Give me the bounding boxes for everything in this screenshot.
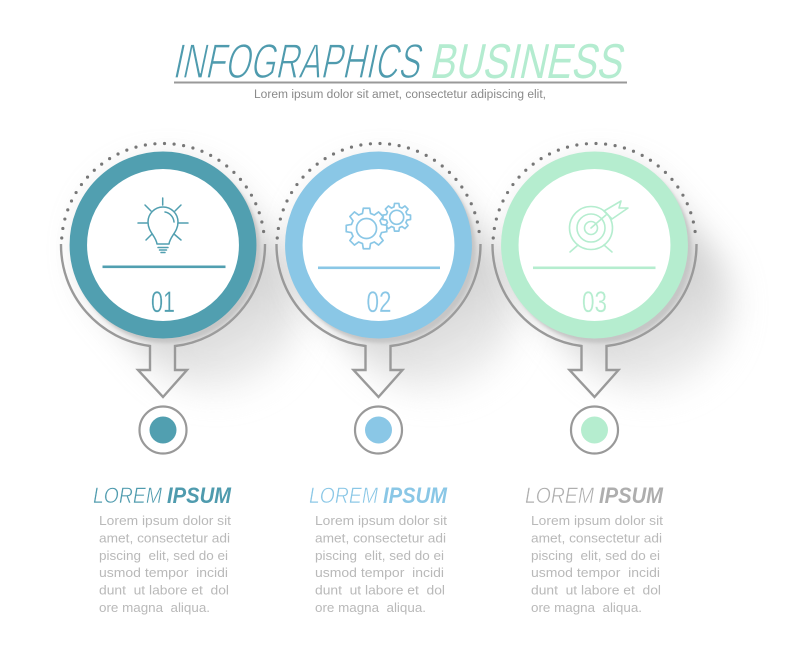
body copy: usmod tempor incidi: [99, 565, 228, 580]
dotted arc: [277, 143, 480, 238]
body copy: dunt ut labore et dol: [99, 583, 229, 598]
body copy: ore magna aliqua.: [531, 600, 642, 615]
heading: IPSUM: [383, 483, 448, 508]
body copy: ore magna aliqua.: [315, 600, 426, 615]
arc and arrow outline: [276, 244, 481, 397]
target marker: [571, 406, 618, 454]
body copy: usmod tempor incidi: [315, 565, 444, 580]
body copy: piscing elit, sed do ei: [315, 548, 444, 563]
number 01: 01: [151, 286, 175, 319]
target marker: [355, 406, 402, 454]
heading: IPSUM: [599, 483, 664, 508]
number 03: 03: [582, 286, 607, 319]
body copy: amet, consectetur adi: [99, 530, 230, 545]
body copy: Lorem ipsum dolor sit: [99, 513, 231, 528]
number 02: 02: [366, 286, 392, 319]
ring drop shadow: [74, 157, 260, 343]
icon: target with arrow: [570, 201, 628, 252]
icon: gears: [346, 203, 411, 249]
body copy: [99, 513, 231, 615]
text block: column 1: [93, 483, 232, 615]
ring: [294, 160, 463, 330]
body copy: amet, consectetur adi: [315, 530, 446, 545]
body copy: [531, 513, 663, 615]
heading: LOREM: [93, 483, 163, 508]
body copy: dunt ut labore et dol: [315, 583, 445, 598]
text block: column 3: [525, 483, 664, 615]
body copy: piscing elit, sed do ei: [99, 548, 228, 563]
body copy: dunt ut labore et dol: [531, 583, 661, 598]
ring: [78, 160, 248, 330]
icon: light bulb: [138, 198, 188, 252]
ring drop shadow: [506, 157, 692, 343]
subtitle: Lorem ipsum dolor sit amet, consectetur adipiscing elit,: [254, 89, 546, 101]
divider: [102, 266, 226, 268]
body copy: amet, consectetur adi: [531, 530, 662, 545]
panel: step 02: [276, 143, 481, 454]
body copy: [315, 513, 447, 615]
ring: [510, 160, 679, 330]
body copy: Lorem ipsum dolor sit: [531, 513, 663, 528]
arc and arrow outline: [492, 244, 697, 397]
title word: infographics: INFOGRAPHICS: [170, 33, 428, 89]
divider: [318, 266, 440, 269]
long shadow: [600, 250, 648, 306]
long shadow: [384, 250, 432, 306]
title word: business: BUSINESS: [427, 33, 630, 89]
body copy: Lorem ipsum dolor sit: [315, 513, 447, 528]
dotted arc: [62, 143, 264, 238]
panel: step 03: [492, 143, 697, 453]
text block: column 2: [309, 483, 448, 615]
title underline: [174, 82, 627, 84]
target marker: [140, 406, 186, 454]
panel: step 01: [61, 143, 265, 454]
arc and arrow outline: [61, 244, 265, 397]
body copy: piscing elit, sed do ei: [531, 548, 660, 563]
heading: LOREM: [525, 483, 595, 508]
body copy: ore magna aliqua.: [99, 600, 210, 615]
long shadow: [168, 250, 216, 306]
ring drop shadow: [290, 157, 476, 343]
title: [170, 33, 630, 89]
dotted arc: [493, 143, 696, 238]
divider: [533, 266, 656, 269]
heading: LOREM: [309, 483, 379, 508]
heading: IPSUM: [167, 483, 232, 508]
body copy: usmod tempor incidi: [531, 565, 660, 580]
